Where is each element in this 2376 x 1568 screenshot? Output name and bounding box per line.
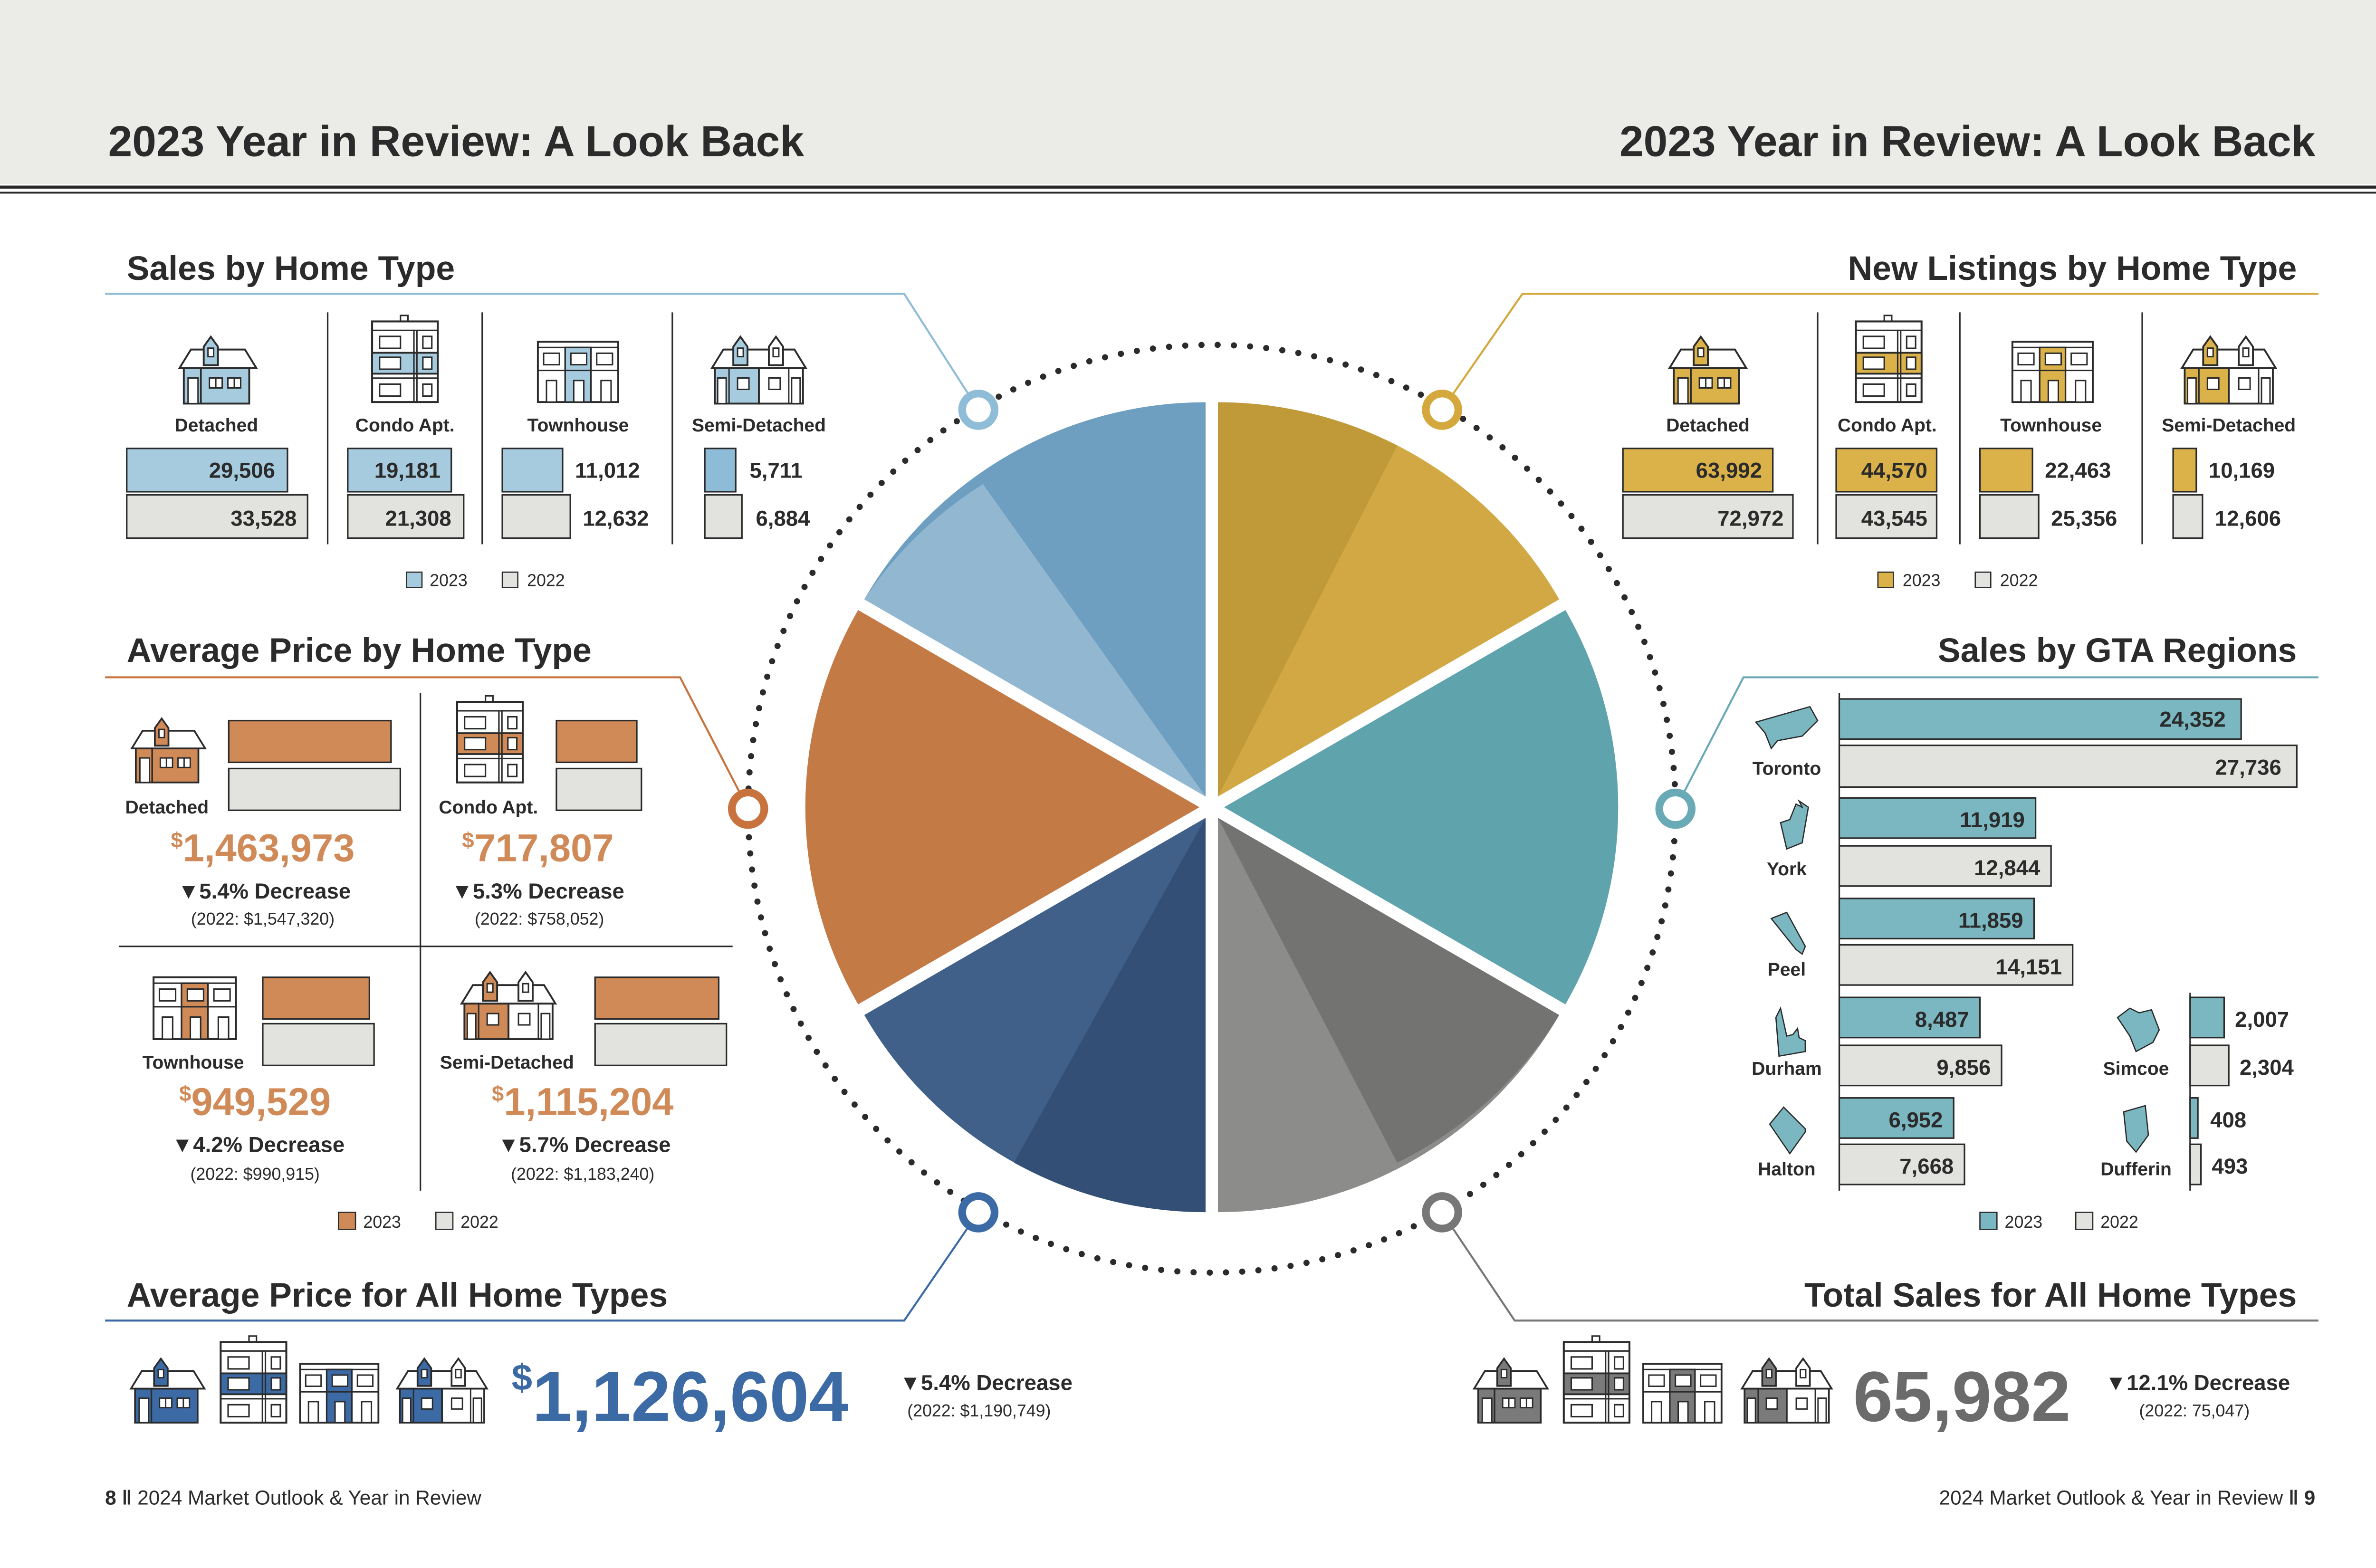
panel: sales by GTA regions: 6,952 xyxy=(1889,1108,1943,1132)
panel: average price by home type: Semi-Detached xyxy=(440,1052,574,1073)
node circles xyxy=(732,393,1692,1229)
panel: sales by home type: 21,308 xyxy=(385,506,451,531)
panel: sales by GTA regions: Sales by GTA Regions xyxy=(1938,631,2297,669)
panel: sales by GTA regions: Toronto xyxy=(1753,758,1821,779)
title left: 2023 Year in Review: A Look Back xyxy=(108,118,804,166)
panel: new listings by home type: 44,570 xyxy=(1861,459,1927,483)
footer right: 2024 Market Outlook & Year in Review ‖ 9 xyxy=(1939,1487,2315,1509)
panel: new listings by home type: 25,356 xyxy=(2051,506,2117,531)
panel: sales by GTA regions: 14,151 xyxy=(1996,955,2062,979)
panel: sales by GTA regions xyxy=(1752,631,2297,1232)
panel: average price by home type: Condo Apt. xyxy=(439,797,538,818)
panel: average price by home type: $ xyxy=(492,1081,504,1106)
panel: new listings by home type: 12,606 xyxy=(2215,506,2281,531)
panel: average price by home type: $ xyxy=(179,1081,191,1106)
panel: total sales all home types: Total Sales for All Home Types xyxy=(1804,1276,2297,1314)
panel: average price by home type: 1,463,973 xyxy=(183,827,354,870)
panel: total sales all home types xyxy=(1474,1276,2297,1436)
panel: sales by GTA regions: 11,919 xyxy=(1960,808,2025,832)
panel: average price by home type: 1,115,204 xyxy=(504,1080,673,1123)
panel: sales by GTA regions: 2,304 xyxy=(2240,1055,2294,1080)
panel: sales by home type: Sales by Home Type xyxy=(127,249,455,287)
panel: total sales all home types: ▼12.1% Decrease xyxy=(2105,1371,2290,1395)
panel: sales by GTA regions: 8,487 xyxy=(1915,1007,1969,1032)
panel: new listings by home type: Townhouse xyxy=(2000,415,2102,436)
panel: sales by home type: Semi-Detached xyxy=(692,415,826,436)
panel: sales by GTA regions: 2022 xyxy=(2100,1213,2138,1232)
panel: average price by home type: ▼5.7% Decrease xyxy=(498,1133,671,1157)
panel: average price by home type: Detached xyxy=(125,797,209,818)
panel: sales by GTA regions: Halton xyxy=(1758,1159,1816,1179)
panel: sales by home type: 19,181 xyxy=(374,459,441,483)
panel: sales by GTA regions: 7,668 xyxy=(1899,1154,1954,1178)
panel: average price by home type: 717,807 xyxy=(474,827,613,870)
header band xyxy=(0,0,2376,193)
panel: sales by GTA regions: 24,352 xyxy=(2159,708,2226,732)
panel: new listings by home type: 72,972 xyxy=(1717,506,1783,531)
panel: new listings by home type: Condo Apt. xyxy=(1838,415,1937,436)
panel: average price by home type: (2022: $990,915) xyxy=(190,1165,320,1184)
panel: sales by home type: 2022 xyxy=(527,571,565,590)
panel: average price by home type: ▼4.2% Decrease xyxy=(172,1133,345,1157)
panel: sales by GTA regions: 2,007 xyxy=(2235,1007,2289,1032)
panel: new listings by home type: 2022 xyxy=(2000,571,2038,590)
panel: average price all home types: (2022: $1,190,749) xyxy=(907,1401,1051,1420)
panel: average price by home type: $ xyxy=(462,828,474,852)
panel: sales by home type: Detached xyxy=(175,415,258,436)
panel: sales by home type: 2023 xyxy=(430,571,468,590)
panel: new listings by home type: Detached xyxy=(1666,415,1750,436)
panel: average price by home type: 2022 xyxy=(460,1213,498,1232)
panel: sales by home type xyxy=(127,249,826,590)
panel: sales by GTA regions: Simcoe xyxy=(2103,1059,2169,1079)
panel: sales by home type: 33,528 xyxy=(230,506,297,531)
panel: average price by home type: 949,529 xyxy=(191,1080,331,1123)
panel: average price by home type xyxy=(119,631,733,1232)
panel: sales by GTA regions: Durham xyxy=(1752,1059,1822,1079)
panel: sales by home type: Condo Apt. xyxy=(355,415,455,436)
panel: sales by GTA regions: Dufferin xyxy=(2100,1159,2172,1179)
panel: sales by GTA regions: 12,844 xyxy=(1974,856,2041,880)
panel: sales by GTA regions: 27,736 xyxy=(2215,755,2281,779)
panel: sales by GTA regions: 493 xyxy=(2212,1154,2248,1178)
panel: sales by GTA regions: 2023 xyxy=(2005,1213,2042,1232)
title right: 2023 Year in Review: A Look Back xyxy=(1619,118,2316,166)
panel: average price by home type: $ xyxy=(171,828,183,852)
panel: sales by home type: 11,012 xyxy=(575,459,640,483)
panel: average price all home types: Average Price for All Home Types xyxy=(127,1276,668,1314)
panel: average price all home types: 1,126,604 xyxy=(532,1357,849,1436)
panel: new listings by home type: 2023 xyxy=(1903,571,1940,590)
panel: sales by GTA regions: Peel xyxy=(1768,960,1806,980)
panel: new listings by home type: 43,545 xyxy=(1861,506,1927,531)
panel: sales by GTA regions: 408 xyxy=(2210,1108,2246,1132)
panel: average price by home type: ▼5.3% Decrease xyxy=(451,879,624,903)
panel: average price all home types: ▼5.4% Decrease xyxy=(900,1371,1073,1395)
panel: average price by home type: Townhouse xyxy=(143,1052,244,1073)
panel: sales by home type: Townhouse xyxy=(527,415,629,436)
panel: sales by home type: 5,711 xyxy=(749,459,803,483)
panel: average price by home type: Average Price by Home Type xyxy=(127,631,592,669)
panel: average price by home type: (2022: $1,183,240) xyxy=(511,1165,654,1184)
pie of photos xyxy=(805,402,1618,1212)
panel: average price by home type: 2023 xyxy=(363,1213,401,1232)
panel: new listings by home type xyxy=(1623,249,2297,590)
panel: sales by GTA regions: 11,859 xyxy=(1958,908,2023,933)
panel: total sales all home types: (2022: 75,047) xyxy=(2139,1401,2250,1420)
dotted circle xyxy=(748,345,1676,1272)
connector lines xyxy=(105,294,2319,1320)
panel: new listings by home type: 10,169 xyxy=(2209,459,2275,483)
panel: new listings by home type: Semi-Detached xyxy=(2162,415,2296,436)
panel: average price by home type: (2022: $758,052) xyxy=(475,909,604,928)
panel: total sales all home types: 65,982 xyxy=(1853,1357,2070,1436)
panel: new listings by home type: New Listings by Home Type xyxy=(1848,249,2297,287)
panel: sales by home type: 6,884 xyxy=(756,506,810,531)
panel: average price by home type: (2022: $1,547,320) xyxy=(191,909,335,928)
panel: sales by home type: 12,632 xyxy=(583,506,649,531)
panel: new listings by home type: 63,992 xyxy=(1696,459,1762,483)
panel: new listings by home type: 22,463 xyxy=(2045,459,2111,483)
panel: sales by GTA regions: York xyxy=(1767,859,1807,880)
panel: average price by home type: ▼5.4% Decrease xyxy=(178,879,351,903)
footer left: 8 ‖ 2024 Market Outlook & Year in Review xyxy=(105,1487,481,1509)
panel: sales by home type: 29,506 xyxy=(209,459,275,483)
panel: average price all home types xyxy=(127,1276,1073,1436)
panel: average price all home types: $ xyxy=(512,1357,532,1398)
panel: sales by GTA regions: 9,856 xyxy=(1936,1055,1991,1080)
